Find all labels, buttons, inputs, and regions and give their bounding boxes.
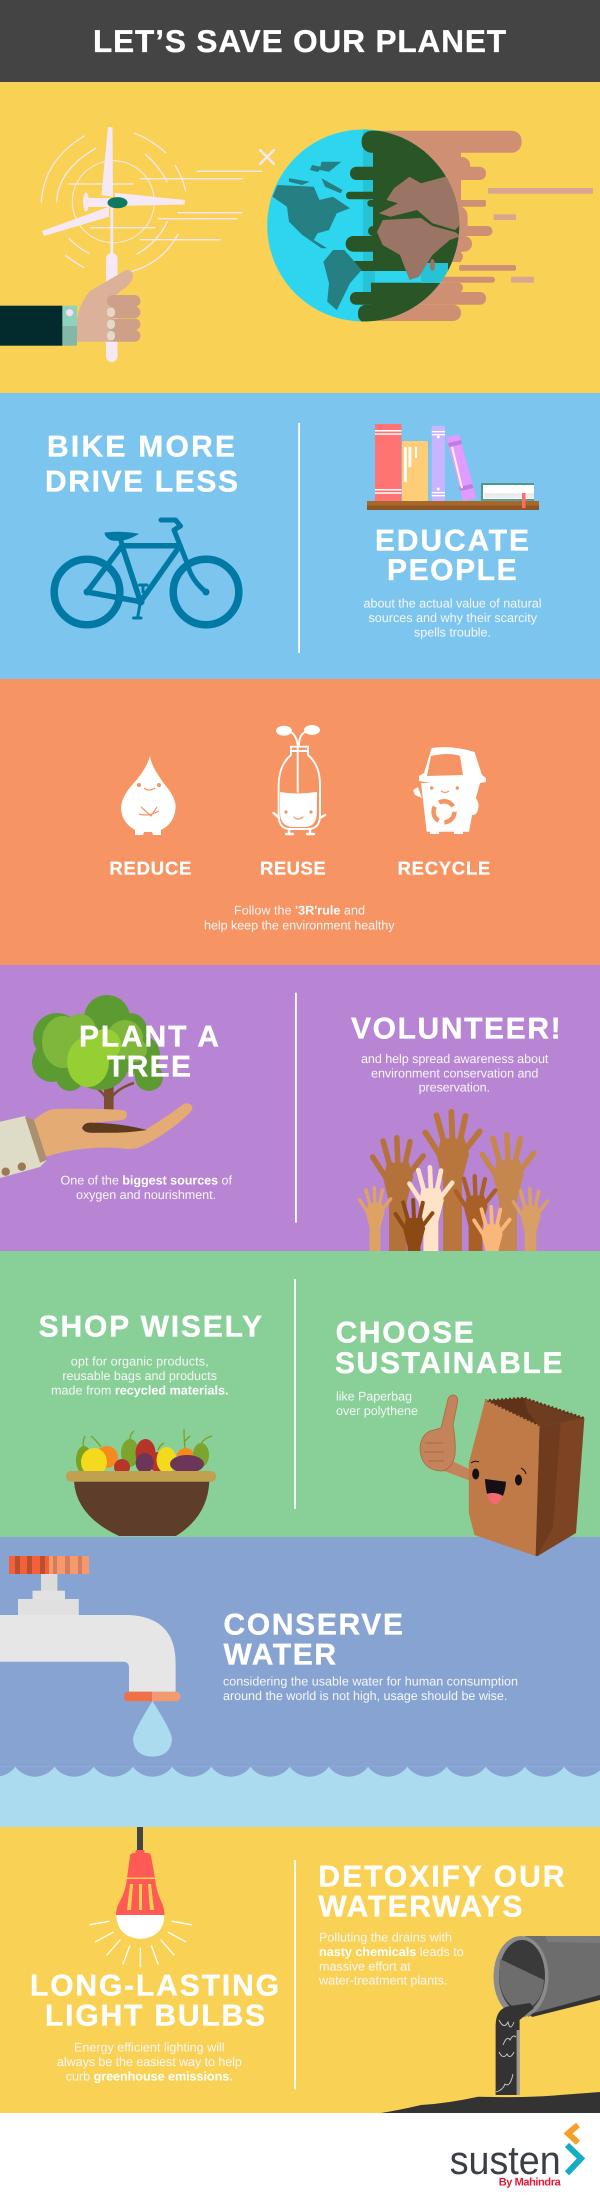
heading: volunteer: VOLUNTEER! bbox=[351, 1012, 561, 1045]
illustration: vegetable bowl bbox=[66, 1429, 216, 1536]
text: volunteer description: preservation. bbox=[419, 1081, 490, 1095]
heading: long-lasting light bulbs bbox=[30, 1970, 279, 2033]
panel: 3R rule bbox=[0, 679, 600, 965]
heading: educate people: PEOPLE bbox=[387, 554, 517, 587]
heading: detoxify our waterways bbox=[318, 1861, 565, 1924]
heading: long-lasting light bulbs: LONG-LASTING bbox=[30, 1970, 279, 2003]
heading: bike more drive less: DRIVE LESS bbox=[45, 466, 238, 499]
heading: detoxify our waterways: WATERWAYS bbox=[318, 1891, 522, 1924]
text: water description: considering the usable water for human consumption bbox=[223, 1675, 518, 1689]
text: waterways description: Polluting the drains with bbox=[319, 1930, 452, 1944]
text: tree description: One of the biggest sources of bbox=[60, 1174, 232, 1188]
labels: reduce reuse recycle: REUSE bbox=[260, 857, 326, 878]
title banner: LET’S SAVE OUR PLANET bbox=[93, 23, 506, 59]
text: bulbs description: Energy efficient lighting will bbox=[74, 2041, 225, 2055]
labels: reduce reuse recycle: RECYCLE bbox=[398, 857, 490, 878]
heading: conserve water bbox=[224, 1608, 403, 1671]
text: educate description: about the actual value of natural bbox=[364, 596, 542, 610]
illustration: tree in hand bbox=[0, 995, 192, 1178]
illustration: hanging bulb bbox=[90, 1827, 191, 1967]
heading: choose sustainable: CHOOSE bbox=[336, 1317, 474, 1350]
text: waterways description bbox=[318, 1930, 464, 1988]
icon: bottle with sprout bbox=[274, 726, 325, 834]
text: bulbs description bbox=[57, 2041, 242, 2083]
text: waterways description: water-treatment plants. bbox=[318, 1974, 447, 1988]
text: bulbs description: curb greenhouse emissions. bbox=[66, 2069, 233, 2083]
heading: conserve water: WATER bbox=[224, 1638, 336, 1671]
labels: reduce reuse recycle bbox=[109, 857, 490, 878]
heading: plant a tree bbox=[79, 1021, 219, 1084]
heading: bike more drive less bbox=[45, 431, 238, 499]
heading: plant a tree: PLANT A bbox=[79, 1021, 219, 1054]
illustration: paper bag thumbs up bbox=[420, 1395, 584, 1556]
text: paperbag note: over polythene bbox=[336, 1404, 418, 1418]
illustration: water waves bbox=[0, 1767, 600, 1827]
text: shop description: opt for organic products, bbox=[71, 1354, 209, 1368]
heading: conserve water: CONSERVE bbox=[224, 1608, 403, 1641]
logo: susten by Mahindra: susten bbox=[450, 2139, 561, 2183]
heading: shop wisely: SHOP WISELY bbox=[39, 1311, 262, 1344]
text: paperbag note bbox=[336, 1390, 418, 1418]
icon: recycling bin bbox=[413, 747, 486, 834]
text: educate description bbox=[364, 596, 542, 639]
text: tree description bbox=[60, 1174, 232, 1202]
text: waterways description: nasty chemicals leads to bbox=[319, 1945, 464, 1959]
illustration: pipe pouring sludge bbox=[381, 1936, 600, 2113]
text: waterways description: massive effort at bbox=[319, 1959, 411, 1973]
text: water description: around the world is not high, usage should be wise. bbox=[223, 1689, 507, 1703]
panel: plant a tree and volunteer bbox=[0, 965, 600, 1251]
text: water description bbox=[223, 1675, 518, 1703]
heading: bike more drive less: BIKE MORE bbox=[47, 431, 235, 464]
text: shop description: reusable bags and products bbox=[62, 1369, 217, 1383]
heading: plant a tree: TREE bbox=[107, 1051, 191, 1084]
text: 3R rule note: help keep the environment healthy bbox=[204, 918, 395, 932]
heading: detoxify our waterways: DETOXIFY OUR bbox=[318, 1861, 565, 1894]
panel: shop wisely and choose sustainable bbox=[0, 1251, 600, 1537]
text: bulbs description: always be the easiest way to help bbox=[57, 2055, 242, 2069]
panel: hero wind turbine and earth bbox=[0, 82, 600, 393]
heading: choose sustainable: SUSTAINABLE bbox=[335, 1347, 562, 1380]
logo: susten by Mahindra: By Mahindra bbox=[499, 2176, 562, 2188]
text: shop description: made from recycled materials. bbox=[51, 1383, 228, 1397]
illustration: wind turbine held by hand bbox=[0, 127, 274, 362]
labels: reduce reuse recycle: REDUCE bbox=[109, 857, 191, 878]
panel: footer logo bbox=[0, 2113, 600, 2200]
heading: choose sustainable bbox=[335, 1317, 562, 1380]
illustration: water tap bbox=[0, 1556, 181, 1757]
text: 3R rule note bbox=[204, 904, 395, 932]
text: educate description: sources and why their scarcity bbox=[368, 611, 538, 625]
icon: bicycle bbox=[54, 520, 239, 625]
illustration: raised hands bbox=[358, 1109, 550, 1251]
heading: educate people: EDUCATE bbox=[375, 525, 529, 558]
heading: long-lasting light bulbs: LIGHT BULBS bbox=[45, 2000, 265, 2033]
text: shop description bbox=[51, 1354, 228, 1397]
text: volunteer description: and help spread awareness about bbox=[361, 1052, 549, 1066]
panel: conserve water bbox=[0, 1537, 600, 1827]
text: tree description: oxygen and nourishment. bbox=[76, 1188, 216, 1202]
heading: educate people bbox=[375, 525, 529, 587]
icon: water drop character bbox=[121, 756, 176, 835]
panel: bike and educate bbox=[0, 393, 600, 679]
panel: light bulbs and waterways bbox=[0, 1827, 600, 2113]
text: volunteer description: environment conservation and bbox=[371, 1066, 538, 1080]
text: paperbag note: like Paperbag bbox=[336, 1390, 412, 1404]
text: volunteer description bbox=[361, 1052, 549, 1095]
text: 3R rule note: Follow the '3R'rule and bbox=[234, 904, 365, 918]
title banner bbox=[0, 0, 600, 82]
text: educate description: spells trouble. bbox=[414, 625, 491, 639]
logo: susten by Mahindra bbox=[450, 2125, 581, 2188]
icon: bookshelf bbox=[367, 424, 539, 510]
illustration: half polluted earth bbox=[267, 128, 593, 323]
